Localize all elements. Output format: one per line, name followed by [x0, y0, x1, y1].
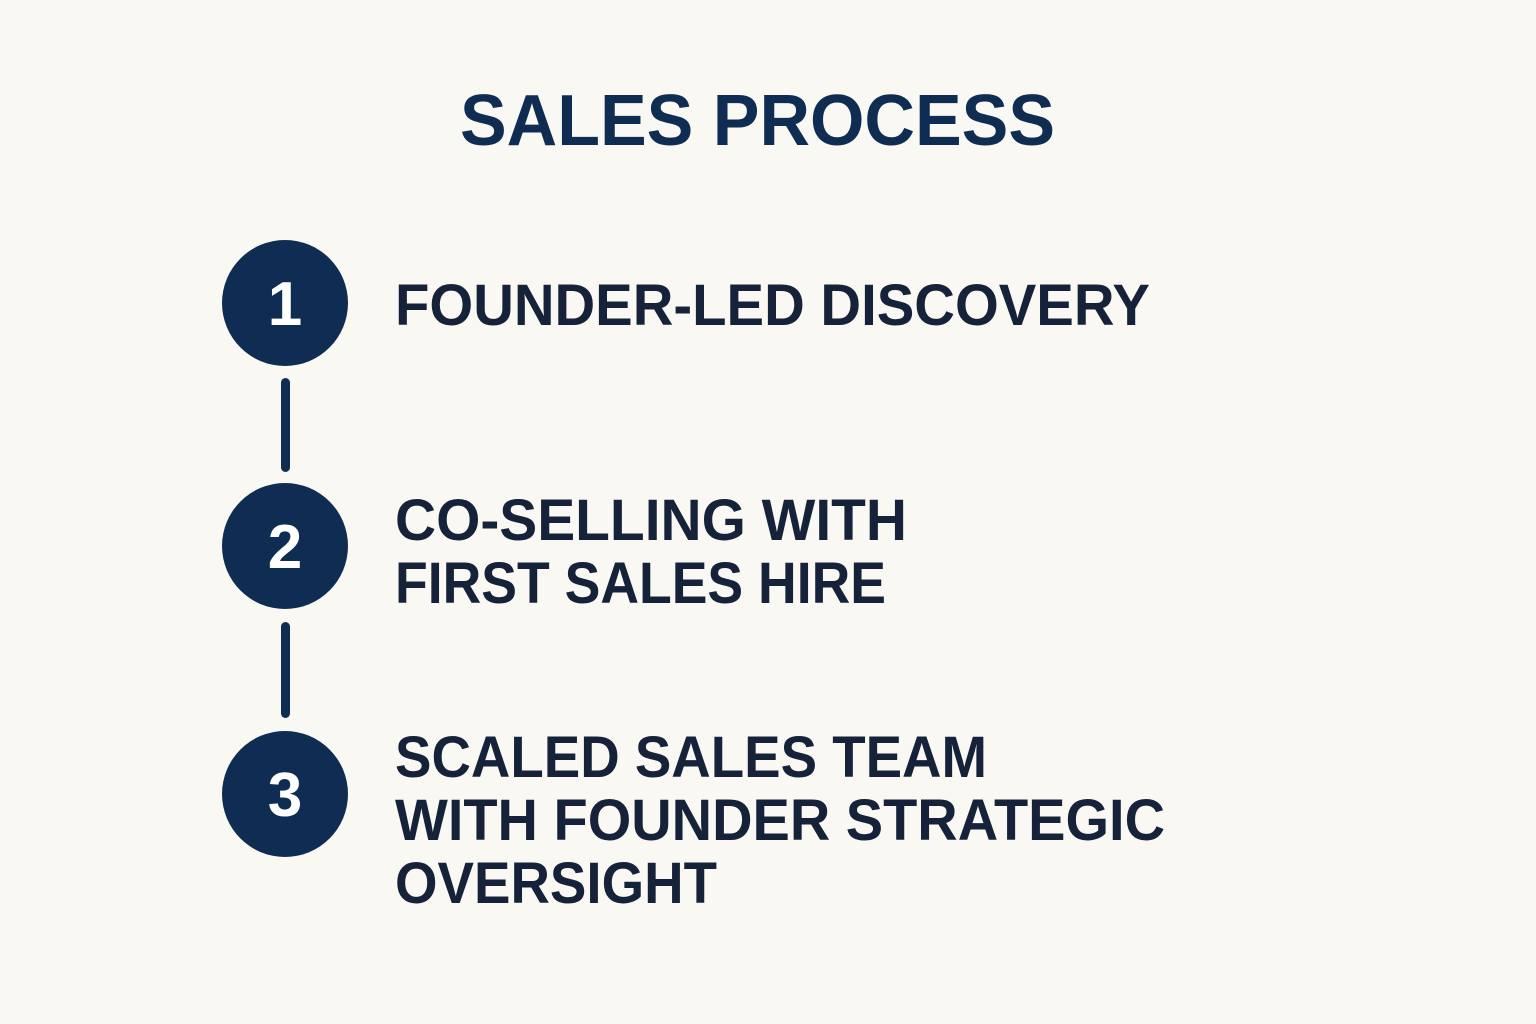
step 3	[222, 725, 1165, 916]
step 1	[222, 240, 1150, 366]
icon: number circle 2: 2	[268, 513, 302, 582]
step 2 label: CO-SELLING WITH	[395, 488, 907, 553]
step 2 label: FIRST SALES HIRE	[395, 551, 886, 616]
icon: number circle 2	[222, 483, 348, 609]
icon: number circle 3	[222, 731, 348, 857]
step 3 label: SCALED SALES TEAM	[395, 725, 987, 790]
connector: step 2 to 3	[281, 622, 290, 718]
step 1 label: FOUNDER-LED DISCOVERY	[395, 273, 1150, 338]
icon: number circle 1	[222, 240, 348, 366]
title: SALES PROCESS	[460, 81, 1055, 161]
step 3 label	[395, 725, 1165, 916]
connector: step 1 to 2	[281, 378, 290, 472]
step 2 label	[395, 488, 907, 616]
icon: number circle 1: 1	[268, 270, 302, 339]
step 2	[222, 483, 907, 616]
step 3 label: WITH FOUNDER STRATEGIC	[395, 788, 1165, 853]
icon: number circle 3: 3	[268, 761, 302, 830]
step 3 label: OVERSIGHT	[395, 851, 717, 916]
